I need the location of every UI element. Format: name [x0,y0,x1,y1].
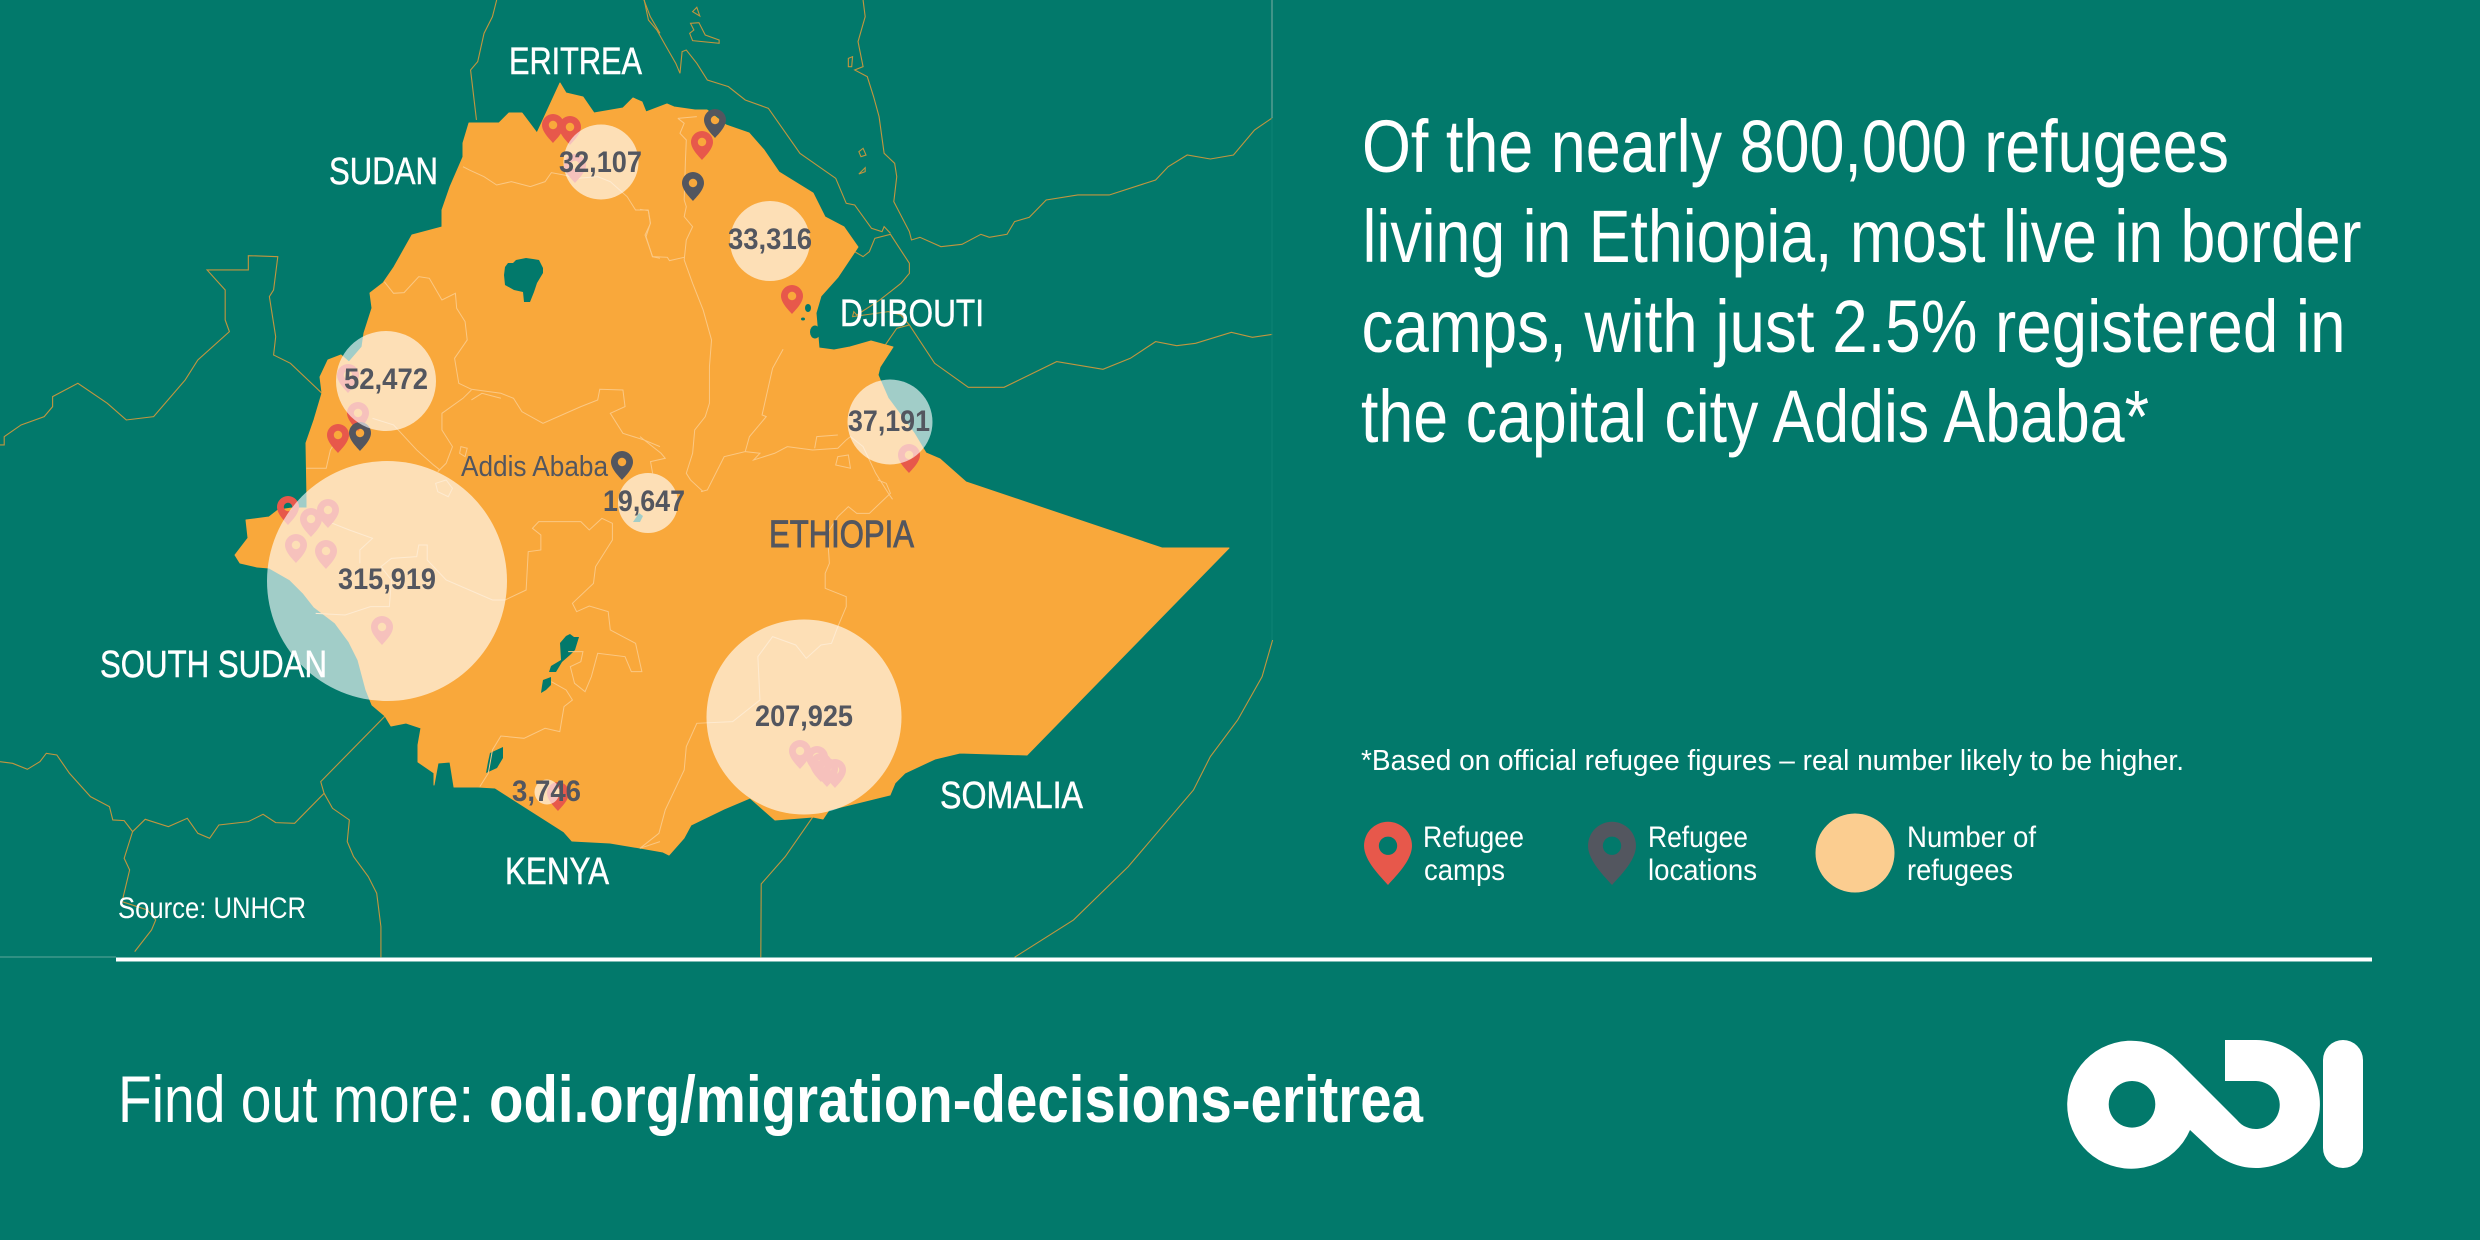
lakes [486,258,820,773]
footer rule [116,958,2372,962]
call to action: odi.org/migration-decisions-eritrea [489,1062,1424,1136]
country labels: ETHIOPIA [769,514,915,556]
legend text: refugee camps: camps [1424,854,1505,887]
country labels: SOUTH SUDAN [100,644,327,686]
country labels [100,41,1084,893]
country labels: SUDAN [329,151,438,193]
refugee number labels: 315,919 [338,563,436,596]
country labels: ERITREA [509,41,643,83]
country labels: KENYA [505,851,610,893]
legend text: refugee locations [1648,821,1757,887]
headline [1361,105,2362,458]
headline: Of the nearly 800,000 refugees [1362,105,2229,188]
Ethiopia country shape [235,83,1229,855]
legend icon: refugee camps pin [1364,822,1412,885]
refugee number labels [338,146,930,808]
ODI logo [2067,1040,2363,1169]
proportional refugee circles [267,124,932,814]
refugee camp pins (red) [277,114,920,811]
country labels: SOMALIA [940,775,1084,817]
legend text: refugee locations: locations [1648,854,1757,887]
legend text: refugee camps: Refugee [1423,821,1524,854]
map: Ethiopia and neighbours [0,0,1273,957]
source note: Source: UNHCR [118,892,306,925]
legend [1364,814,2037,892]
refugee number labels: 207,925 [755,700,853,733]
refugee number labels: 32,107 [559,146,642,179]
legend text: number of refugees [1907,821,2037,887]
city label: Addis Ababa: Addis Ababa [461,451,609,483]
refugee location pins (grey) [349,109,726,480]
call to action [118,1062,1424,1136]
legend text: number of refugees: refugees [1907,854,2013,887]
headline: the capital city Addis Ababa* [1361,375,2149,458]
legend text: number of refugees: Number of [1907,821,2037,854]
neighbouring country borders [0,0,1273,957]
refugee number labels: 33,316 [728,223,812,256]
legend icon: refugee locations pin [1588,822,1636,885]
refugee number labels: 19,647 [603,485,685,518]
country labels: DJIBOUTI [840,293,984,335]
internal region borders [306,117,893,848]
legend text: refugee camps [1423,821,1524,887]
footnote: *Based on official refugee figures – real number likely to be higher. [1361,745,2184,777]
call to action: Find out more: [118,1062,474,1136]
refugee number labels: 3,746 [512,775,581,808]
legend text: refugee locations: Refugee [1648,821,1748,854]
headline: camps, with just 2.5% registered in [1362,285,2346,368]
refugee number labels: 37,191 [848,405,930,438]
refugee number labels: 52,472 [344,363,428,396]
legend icon: number of refugees circle [1816,814,1894,892]
